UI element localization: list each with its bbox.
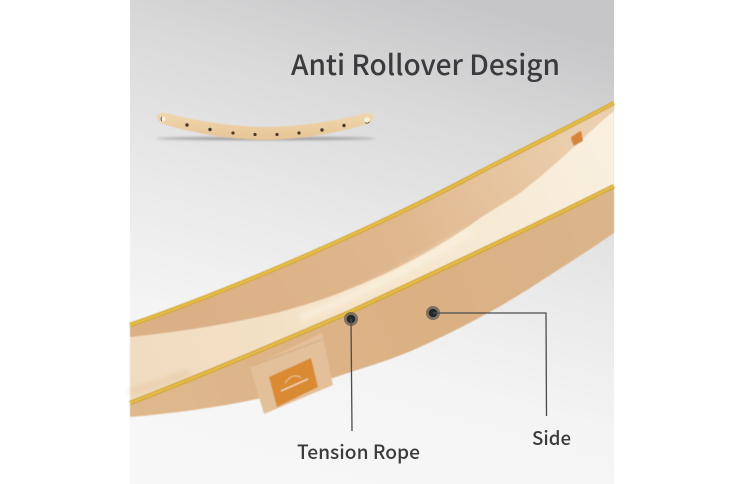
fabric highlight streak [300,232,470,318]
marker dot [344,312,358,326]
leader line [351,319,352,431]
storage pouch [250,333,333,414]
label: Tension Rope [297,436,420,465]
fabric tan streak [130,372,190,392]
hammock inner far wall [130,103,614,405]
wooden spreader bar [157,113,374,140]
label: Side [532,424,571,451]
pouch flap crease [252,340,321,366]
pouch body [250,333,333,414]
pouch logo text [281,379,308,391]
hammock [130,103,614,417]
spreader bar shadow [156,137,376,140]
callout: side [426,306,571,451]
orange pouch label [269,358,318,407]
lower gold rope [130,186,614,403]
upper gold rope [130,103,614,325]
background panel [130,0,614,484]
spreader bar illustration [156,113,376,140]
pouch logo mark [285,376,301,383]
marker dot [426,306,440,320]
callout: tension rope [297,312,420,465]
hammock outer side panel [130,186,614,417]
leader line [433,313,546,416]
orange tag [571,131,583,146]
cream hammock bed [130,111,614,404]
title: Anti Rollover Design [291,44,560,84]
spreader bar holes [160,116,370,136]
